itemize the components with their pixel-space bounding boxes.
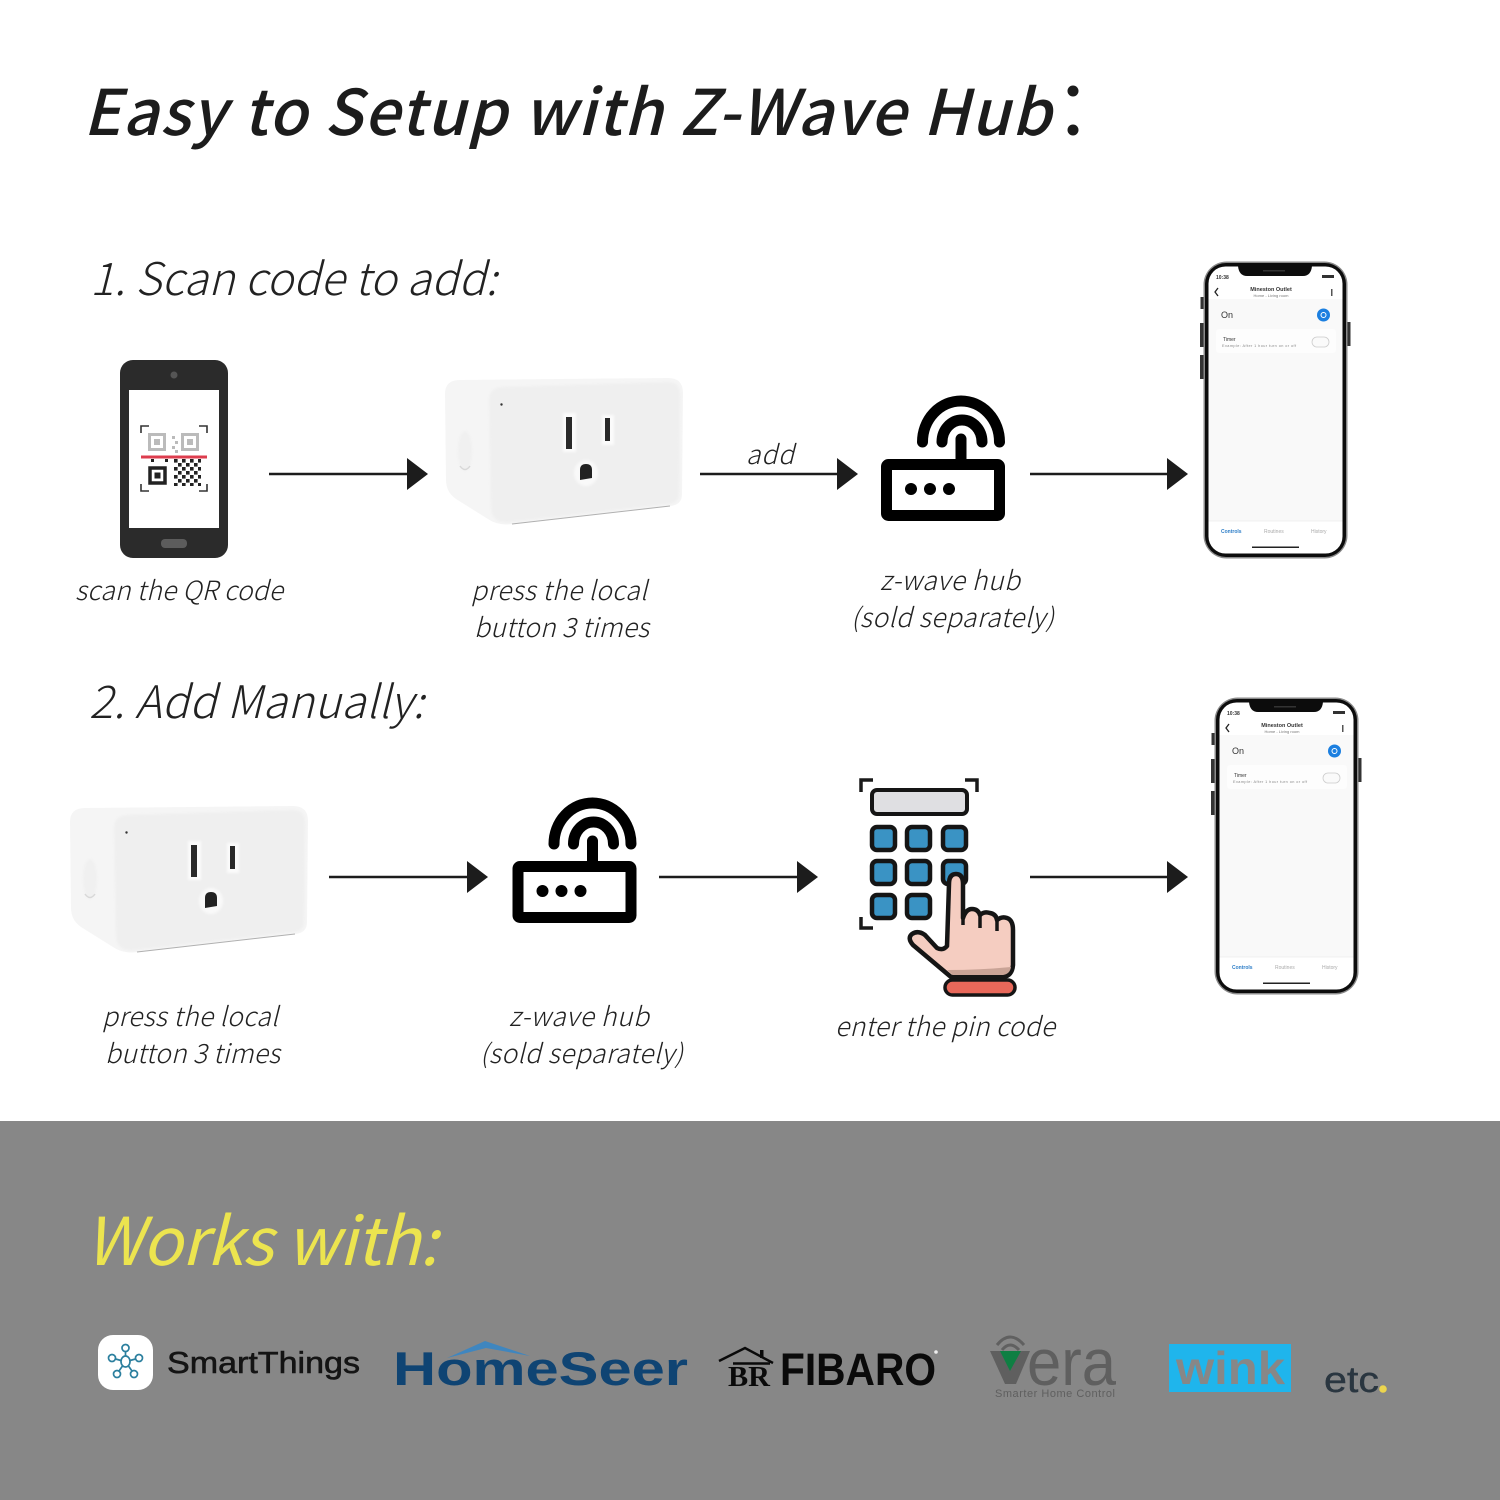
logo: SmartThings xyxy=(98,1335,360,1390)
logo: FIBARO: FIBARO xyxy=(780,1344,936,1395)
heading: works with: Works with: xyxy=(85,1189,442,1285)
logo: Vera xyxy=(990,1325,1116,1400)
caption: z-wave hub sold separately: z-wave hub xyxy=(880,559,1022,598)
caption: scan the QR code: scan the QR code xyxy=(75,569,286,608)
arrow with add label: add xyxy=(746,433,797,472)
icon: smartphone scanning QR code xyxy=(120,360,228,558)
heading: step 2: 2. Add Manually: xyxy=(89,666,427,731)
logo: Vera: era xyxy=(1027,1325,1116,1399)
logo: wink: wink xyxy=(1175,1342,1285,1394)
caption: z-wave hub sold separately xyxy=(480,995,685,1071)
caption: press the local button 3 times: press the local xyxy=(471,569,650,608)
text: etc.: etc xyxy=(1324,1359,1379,1400)
arrow xyxy=(659,861,818,893)
caption: press the local button 3 times xyxy=(471,569,651,645)
icon: smart plug xyxy=(445,378,683,524)
arrow xyxy=(329,861,488,893)
caption: z-wave hub sold separately xyxy=(851,559,1056,635)
title: Easy to Setup with Z-Wave Hub xyxy=(83,63,1055,154)
arrow xyxy=(1030,458,1188,490)
caption: press the local button 3 times: button 3 times xyxy=(474,606,651,645)
arrow with add label xyxy=(700,433,858,490)
icon: phone app screen xyxy=(1200,262,1350,558)
icon: keypad with pressing hand xyxy=(861,780,1015,995)
heading: step 1: 1. Scan code to add: xyxy=(90,243,500,308)
arrow xyxy=(1030,861,1188,893)
icon: z-wave hub xyxy=(886,401,1000,516)
caption: z-wave hub sold separately: (sold separately) xyxy=(480,1032,685,1071)
arrow xyxy=(269,458,428,490)
icon: z-wave hub xyxy=(518,803,631,918)
logo: SmartThings: SmartThings xyxy=(167,1345,360,1380)
caption: z-wave hub sold separately: (sold separately) xyxy=(851,596,1056,635)
logo: FIBARO xyxy=(719,1344,938,1395)
caption: press the local button 3 times xyxy=(102,995,282,1071)
logo: HomeSeer: HomeSeer xyxy=(393,1342,688,1395)
caption: press the local button 3 times: button 3 times xyxy=(105,1032,282,1071)
icon: phone app screen xyxy=(1211,698,1362,994)
panel: works with xyxy=(0,1121,1500,1500)
caption: press the local button 3 times: press the local xyxy=(102,995,281,1034)
caption: z-wave hub sold separately: z-wave hub xyxy=(509,995,651,1034)
logo: Vera: Smarter Home Control xyxy=(995,1388,1115,1400)
logo: FIBARO: BR xyxy=(728,1362,771,1393)
icon: smart plug xyxy=(70,806,308,952)
caption: enter the pin code: enter the pin code xyxy=(835,1005,1058,1044)
